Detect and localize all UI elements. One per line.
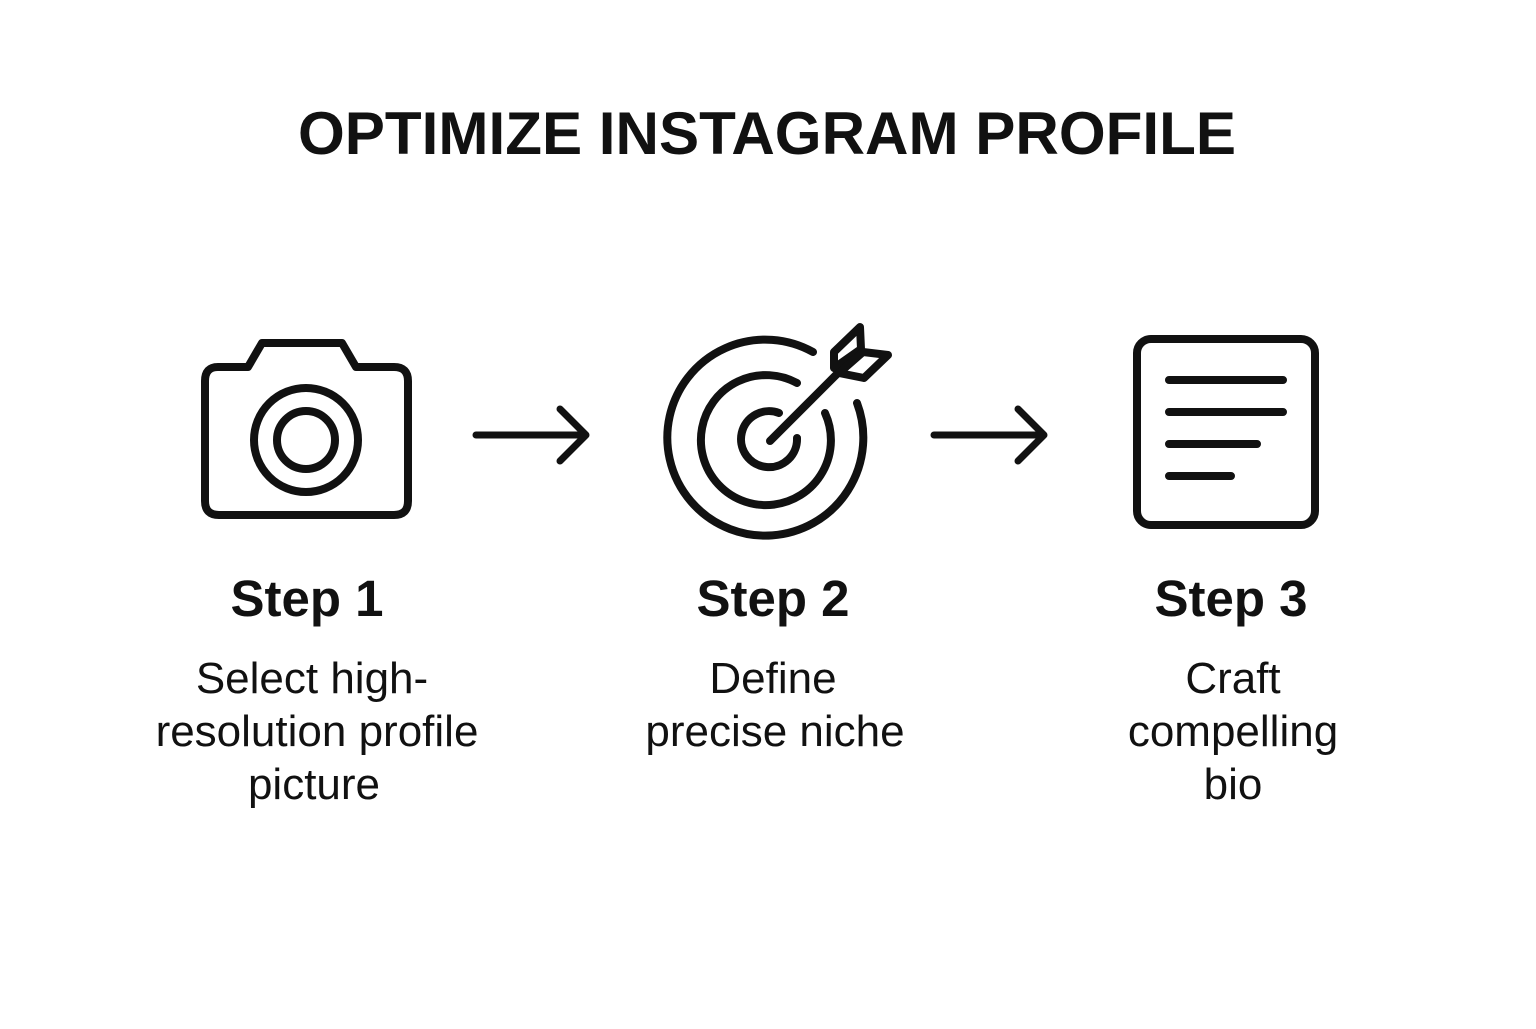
step 2 text: Define (709, 654, 837, 703)
icon: document (1137, 339, 1315, 525)
step 2 label: Step 2 (696, 570, 850, 627)
step 1 text: Select high- (196, 654, 428, 703)
step 1 label: Step 1 (230, 570, 384, 627)
step 2 text: precise niche (645, 707, 905, 756)
step 1 text: resolution profile (156, 707, 478, 756)
icon: camera (205, 343, 408, 515)
step 3 text: bio (1204, 760, 1262, 809)
step 1 text: picture (248, 760, 380, 809)
title: OPTIMIZE INSTAGRAM PROFILE (298, 100, 1236, 167)
arrow 2 (934, 409, 1044, 461)
arrow 1 (476, 409, 586, 461)
icon: target (667, 327, 888, 536)
step 3 label: Step 3 (1154, 570, 1308, 627)
step 3 text: Craft (1185, 654, 1281, 703)
step 3 text: compelling (1128, 707, 1338, 756)
